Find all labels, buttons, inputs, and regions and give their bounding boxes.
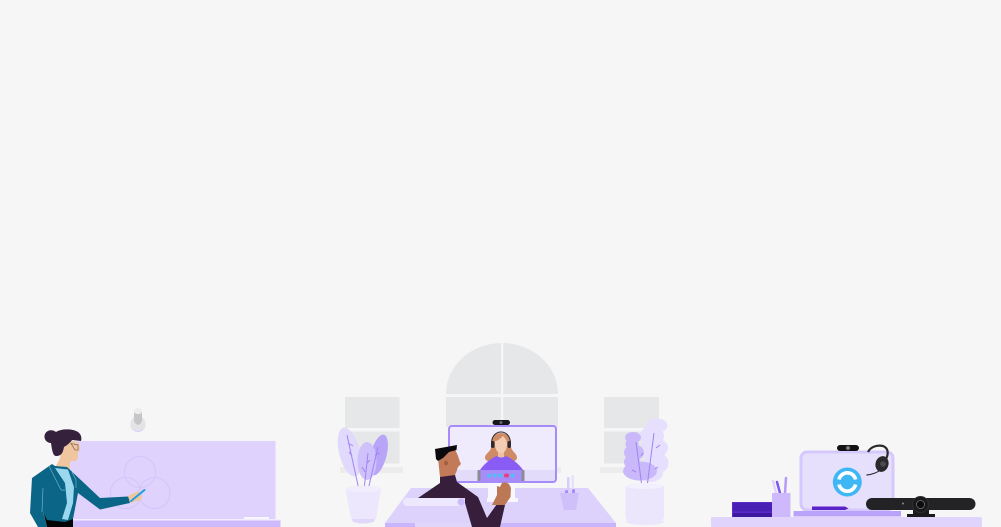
- chair back: [403, 498, 464, 506]
- scene: conferencing hardware on desk: [711, 445, 982, 527]
- ear: [444, 460, 448, 466]
- left plant: [333, 425, 392, 524]
- whiteboard ledge and eraser: [72, 517, 280, 527]
- monitor showing video call: [449, 426, 556, 482]
- person: woman presenting: [30, 429, 144, 527]
- hair: [435, 445, 457, 461]
- scene: video call at desk: [333, 343, 668, 527]
- call control bar: [478, 470, 524, 482]
- pen cup: [560, 475, 579, 510]
- icon: headset: [866, 446, 890, 475]
- right window: [600, 397, 663, 473]
- neck and face: [56, 440, 80, 472]
- stylus: [812, 506, 848, 510]
- head: [438, 449, 461, 477]
- desk: [385, 488, 616, 527]
- hair: [44, 429, 81, 456]
- conference camera bar: [866, 496, 976, 517]
- trousers: [43, 511, 73, 527]
- hand: [128, 491, 142, 503]
- icon: ceiling speaker: [130, 408, 146, 432]
- monitor stand: [487, 482, 518, 502]
- scene: presenter at whiteboard: [30, 408, 280, 527]
- torso and arm: [418, 475, 505, 527]
- jacket and arm: [30, 464, 130, 527]
- webcam: [837, 445, 859, 451]
- pen: [131, 490, 144, 501]
- hand raised: [492, 482, 511, 505]
- laptop: [794, 452, 901, 516]
- tabletop: [711, 517, 982, 527]
- icon: sync logo: [833, 468, 862, 496]
- back foliage: [637, 418, 668, 482]
- whiteboard: [70, 441, 276, 520]
- person: man on video call: [403, 445, 511, 527]
- glasses: [71, 444, 78, 450]
- front foliage: [623, 432, 657, 480]
- pencil cup: [772, 478, 790, 517]
- jacket lapel line: [42, 466, 76, 512]
- webcam on monitor: [492, 420, 510, 425]
- right plant: [623, 418, 668, 525]
- arched window: [440, 343, 561, 473]
- left window: [340, 397, 403, 473]
- remote participant: [480, 432, 523, 470]
- shirt: [55, 468, 74, 520]
- purple books: [732, 502, 772, 517]
